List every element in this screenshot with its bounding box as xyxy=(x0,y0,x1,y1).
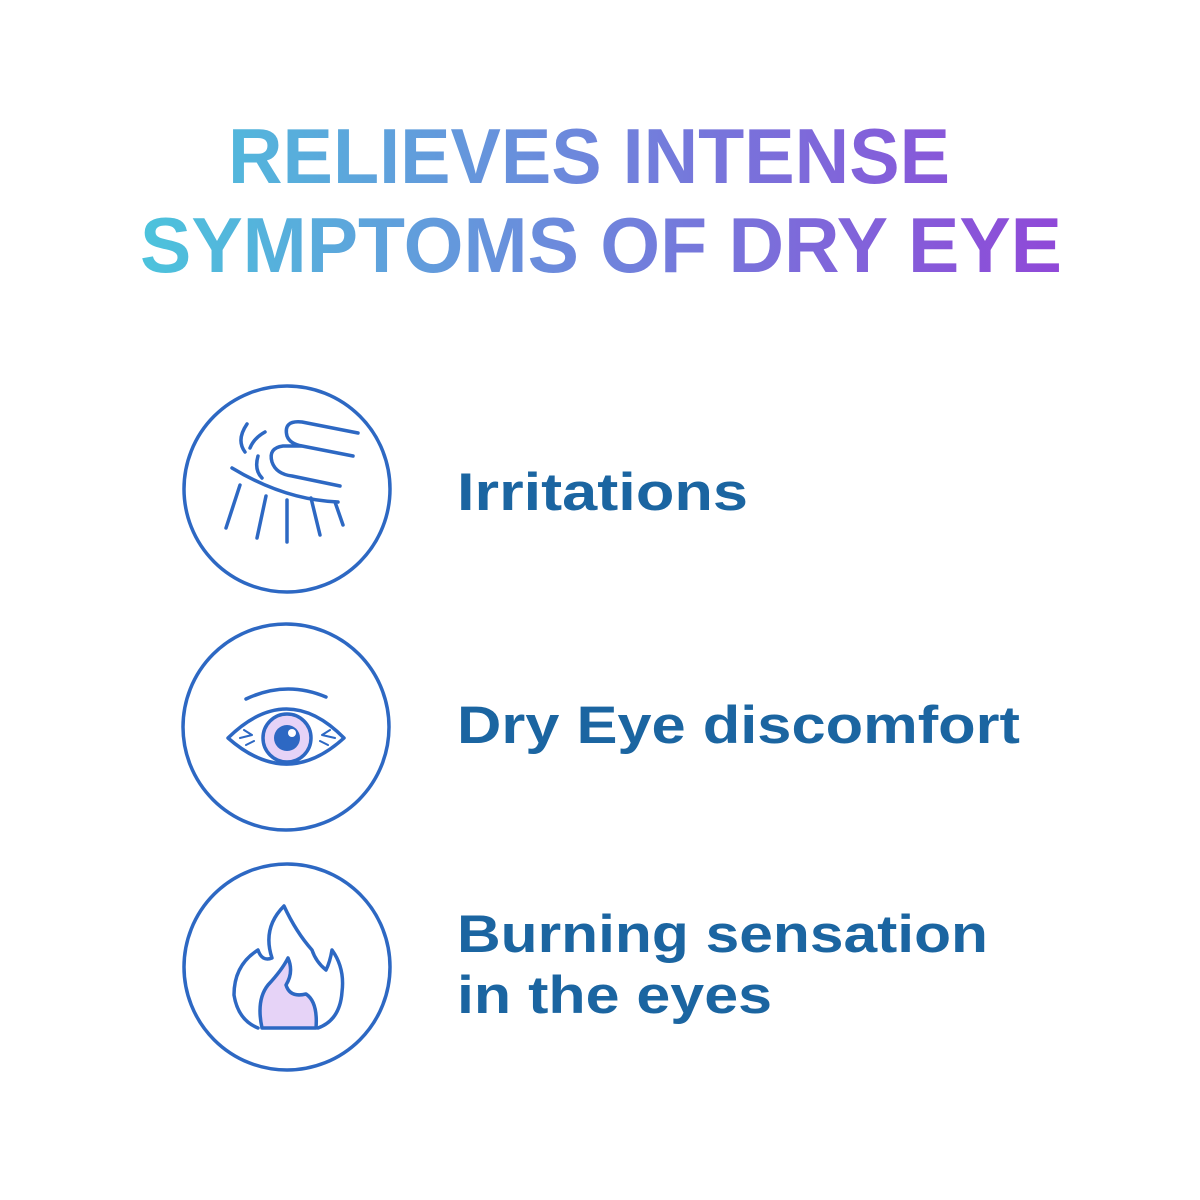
icon: red eye xyxy=(183,624,389,830)
title: RELIEVES INTENSE xyxy=(228,112,950,200)
label: Dry Eye discomfort: Dry Eye discomfort xyxy=(457,696,1020,755)
icon: rubbing eye xyxy=(184,386,390,592)
title xyxy=(140,112,1062,289)
title: SYMPTOMS OF DRY EYE xyxy=(140,201,1062,289)
label: in the eyes: in the eyes xyxy=(457,966,772,1025)
labels xyxy=(457,463,1020,1025)
icon: flame xyxy=(184,864,390,1070)
label: Irritations: Irritations xyxy=(457,463,748,522)
label: Burning sensation: Burning sensation xyxy=(457,905,988,964)
